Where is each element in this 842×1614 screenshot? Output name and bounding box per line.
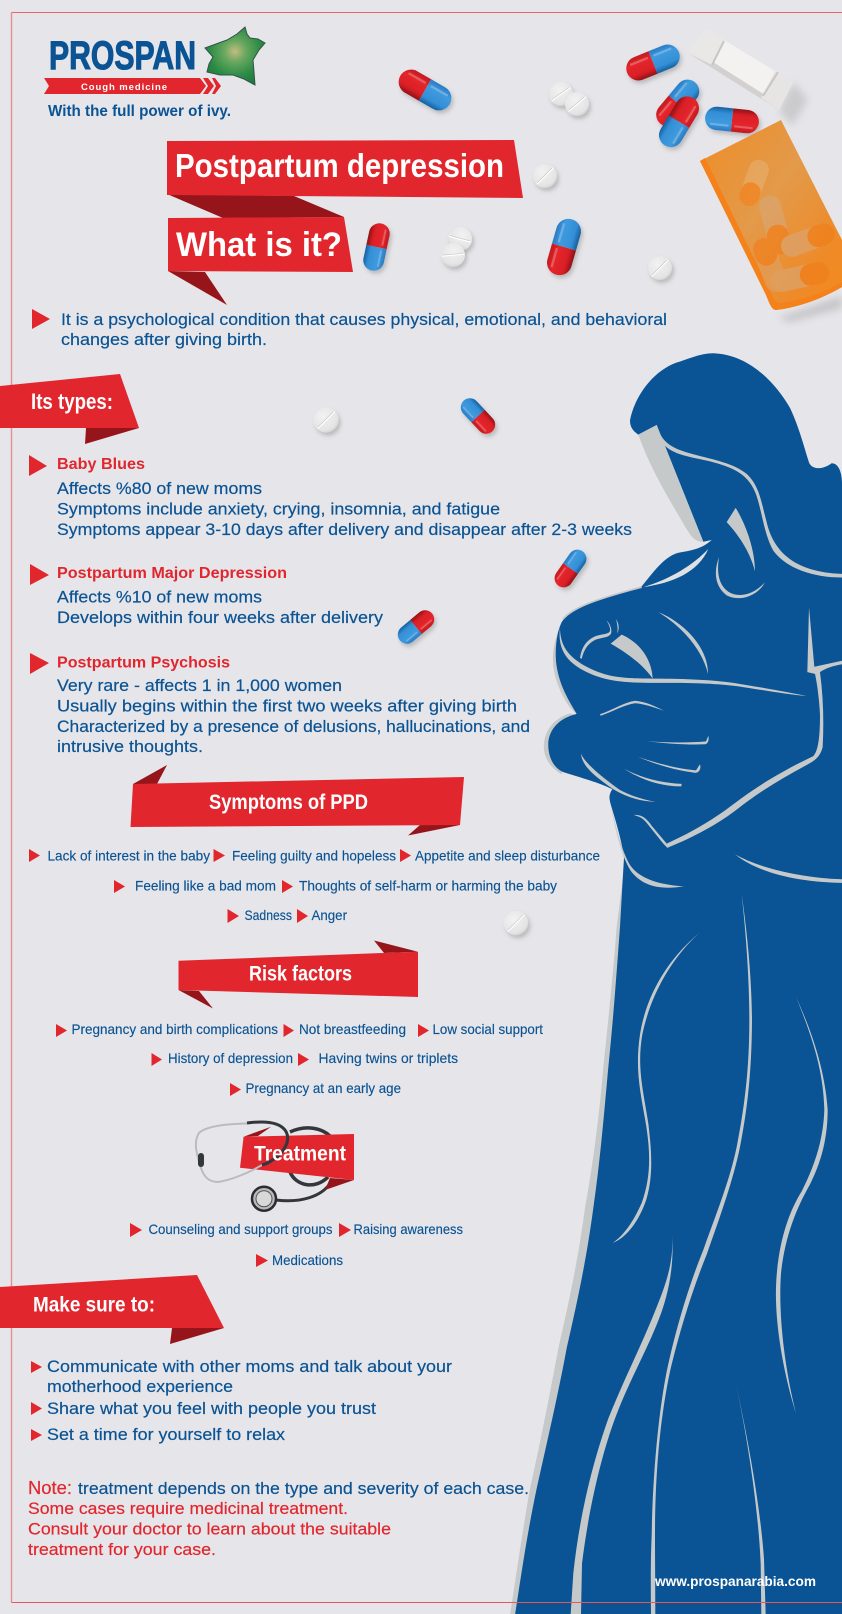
pills and tablets scattered [313, 41, 760, 935]
type: Postpartum Major Depression: Develops within four weeks after delivery [57, 608, 384, 627]
list: symptoms: Sadness [244, 907, 292, 923]
heading ribbon: Risk factors: Risk factors [249, 963, 352, 986]
heading ribbon: What is it?: What is it? [176, 226, 342, 264]
type: Postpartum Psychosis: Postpartum Psychosis [57, 654, 230, 672]
white pill box [688, 29, 808, 126]
heading ribbon: Treatment with stethoscope: Treatment [254, 1143, 346, 1166]
list: risk factors: Having twins or triplets [318, 1050, 458, 1066]
brand name: PROSPAN [49, 34, 196, 78]
heading ribbon: Treatment with stethoscope [196, 1122, 354, 1211]
list: risk factors: History of depression [168, 1050, 293, 1066]
type: Postpartum Psychosis: Usually begins within the first two weeks after giving birth [57, 696, 517, 716]
list: symptoms: Appetite and sleep disturbance [415, 848, 600, 864]
note [28, 1478, 529, 1559]
list: risk factors: Not breastfeeding [299, 1021, 406, 1037]
list: treatment [130, 1221, 463, 1268]
heading ribbon: Its types [0, 374, 139, 444]
icon: stethoscope front tubes and head [196, 1122, 288, 1211]
note: Some cases require medicinal treatment. [28, 1499, 348, 1518]
type: Postpartum Psychosis [30, 653, 530, 756]
note: treatment depends on the type and severity of each case. [78, 1479, 529, 1498]
heading ribbon: Symptoms of PPD [130, 765, 464, 836]
tagline: With the full power of ivy. [48, 103, 231, 120]
list: symptoms: Thoughts of self-harm or harming the baby [299, 878, 557, 894]
type: Baby Blues: Symptoms appear 3-10 days after delivery and disappear after 2-3 weeks [57, 520, 632, 539]
title ribbon: Postpartum depression [167, 140, 523, 218]
icon: stethoscope back tubes [276, 1128, 332, 1201]
list: make sure to: motherhood experience [47, 1377, 233, 1396]
heading ribbon: Make sure to [0, 1275, 224, 1344]
heading ribbon: Risk factors [178, 940, 418, 1008]
list: symptoms: Feeling guilty and hopeless [232, 848, 396, 864]
type: Baby Blues: Affects %80 of new moms [57, 479, 262, 498]
logo: Prospan [44, 27, 265, 120]
list: make sure to: Communicate with other moms and talk about your [47, 1357, 452, 1376]
website: www.prospanarabia.com [654, 1573, 816, 1589]
type: Baby Blues: Symptoms include anxiety, crying, insomnia, and fatigue [57, 500, 500, 518]
type: Postpartum Psychosis: Characterized by a presence of delusions, hallucinations, and [57, 717, 530, 736]
list: symptoms: Feeling like a bad mom [135, 878, 276, 894]
type: Postpartum Major Depression: Affects %10 of new moms [57, 588, 262, 606]
heading ribbon: Symptoms of PPD: Symptoms of PPD [209, 791, 368, 814]
heading ribbon: Its types: Its types: [31, 389, 113, 414]
list: treatment: Counseling and support groups [148, 1221, 332, 1237]
figure: mother holding baby silhouette [510, 353, 842, 1614]
heading ribbon: Make sure to: Make sure to: [33, 1294, 155, 1317]
list: treatment: Raising awareness [354, 1221, 463, 1237]
note: treatment for your case. [28, 1540, 216, 1559]
note: Note: [28, 1478, 72, 1498]
list: make sure to: Share what you feel with people you trust [47, 1399, 376, 1418]
orange medicine bottle [700, 120, 842, 322]
heading ribbon: What is it? [168, 217, 353, 305]
icon: ivy leaf [205, 27, 265, 85]
list: symptoms: Anger [312, 907, 347, 923]
list: risk factors: Low social support [432, 1021, 543, 1037]
list: symptoms: Lack of interest in the baby [48, 848, 210, 864]
definition text [32, 309, 667, 349]
list: symptoms [29, 848, 600, 923]
type: Postpartum Psychosis: Very rare - affects 1 in 1,000 women [57, 676, 342, 695]
logo ribbon: Cough medicine [81, 82, 167, 93]
definition text: changes after giving birth. [61, 330, 267, 349]
list: risk factors [56, 1021, 543, 1096]
type: Baby Blues: Baby Blues [57, 456, 145, 473]
definition text: It is a psychological condition that causes physical, emotional, and behavioral [61, 310, 667, 329]
list: make sure to: Set a time for yourself to relax [47, 1425, 286, 1444]
type: Postpartum Psychosis: intrusive thoughts. [57, 737, 203, 756]
list: risk factors: Pregnancy at an early age [246, 1080, 401, 1096]
logo ribbon [44, 78, 221, 94]
type: Postpartum Major Depression: Postpartum Major Depression [57, 565, 287, 582]
type: Postpartum Major Depression [30, 564, 384, 627]
note: Consult your doctor to learn about the suitable [28, 1520, 391, 1538]
type: Baby Blues [29, 455, 632, 539]
list: make sure to [31, 1357, 452, 1444]
list: risk factors: Pregnancy and birth complications [72, 1021, 278, 1037]
list: treatment: Medications [272, 1252, 343, 1268]
title ribbon: Postpartum depression: Postpartum depression [175, 147, 504, 184]
